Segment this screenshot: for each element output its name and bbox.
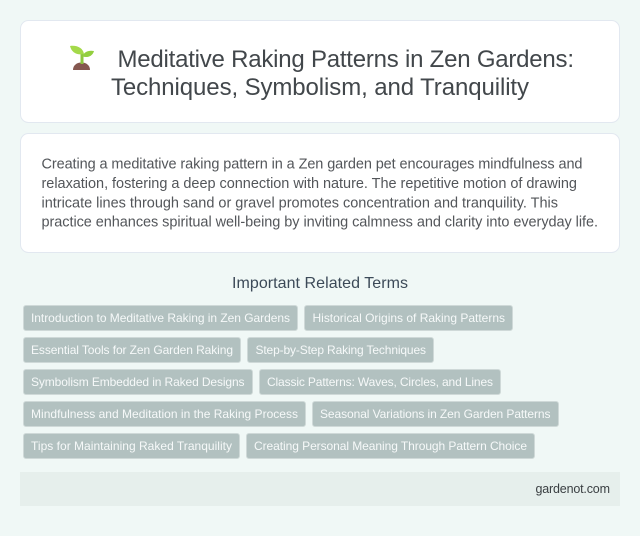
- tag: mindfulness: Mindfulness and Meditation in the Raking Process: [31, 407, 298, 421]
- icon: sprout: [70, 46, 94, 70]
- tag: essential tools: Essential Tools for Zen Garden Raking: [31, 343, 233, 357]
- footer bar: [20, 472, 620, 506]
- description text: practice enhances spiritual well-being by inviting calmness and clarity into everyday life.: [42, 214, 598, 230]
- tag: tips: Tips for Maintaining Raked Tranquility: [31, 439, 232, 453]
- title: Meditative Raking Patterns in Zen Gardens:: [118, 46, 574, 73]
- tag: classic patterns: [260, 370, 500, 394]
- title: Techniques, Symbolism, and Tranquility: [111, 74, 529, 101]
- tag: seasonal variations: Seasonal Variations in Zen Garden Patterns: [320, 407, 550, 421]
- description text: relaxation, fostering a deep connection with nature. The repetitive motion of drawing: [42, 176, 577, 192]
- panel: description card: [20, 134, 620, 252]
- tag: personal meaning: Creating Personal Meaning Through Pattern Choice: [254, 439, 527, 453]
- tag: seasonal variations: [312, 402, 558, 426]
- tag: introduction: Introduction to Meditative Raking in Zen Gardens: [31, 311, 290, 325]
- description text: Creating a meditative raking pattern in a Zen garden pet encourages mindfulness and: [42, 156, 582, 172]
- tag: symbolism: Symbolism Embedded in Raked Designs: [31, 375, 244, 389]
- tag list: [24, 306, 558, 458]
- tag: classic patterns: Classic Patterns: Waves, Circles, and Lines: [267, 375, 493, 389]
- footer site name: gardenot.com: [536, 482, 610, 496]
- tag: step-by-step: [248, 338, 434, 362]
- tag: introduction: [24, 306, 298, 330]
- title: [111, 46, 574, 101]
- tag: historical origins: [304, 306, 512, 330]
- tag: mindfulness: [24, 402, 306, 426]
- description text: [42, 156, 598, 230]
- tag: symbolism: [24, 370, 252, 394]
- tag: essential tools: [24, 338, 240, 362]
- tag: personal meaning: [246, 434, 534, 458]
- heading: important related terms: Important Related Terms: [232, 275, 408, 292]
- tag: step-by-step: Step-by-Step Raking Techniques: [256, 343, 426, 357]
- panel: title card: [20, 20, 620, 122]
- tag: tips: [24, 434, 240, 458]
- description text: intricate lines through sand or gravel promotes concentration and tranquility. This: [42, 196, 558, 212]
- tag: historical origins: Historical Origins of Raking Patterns: [312, 311, 505, 325]
